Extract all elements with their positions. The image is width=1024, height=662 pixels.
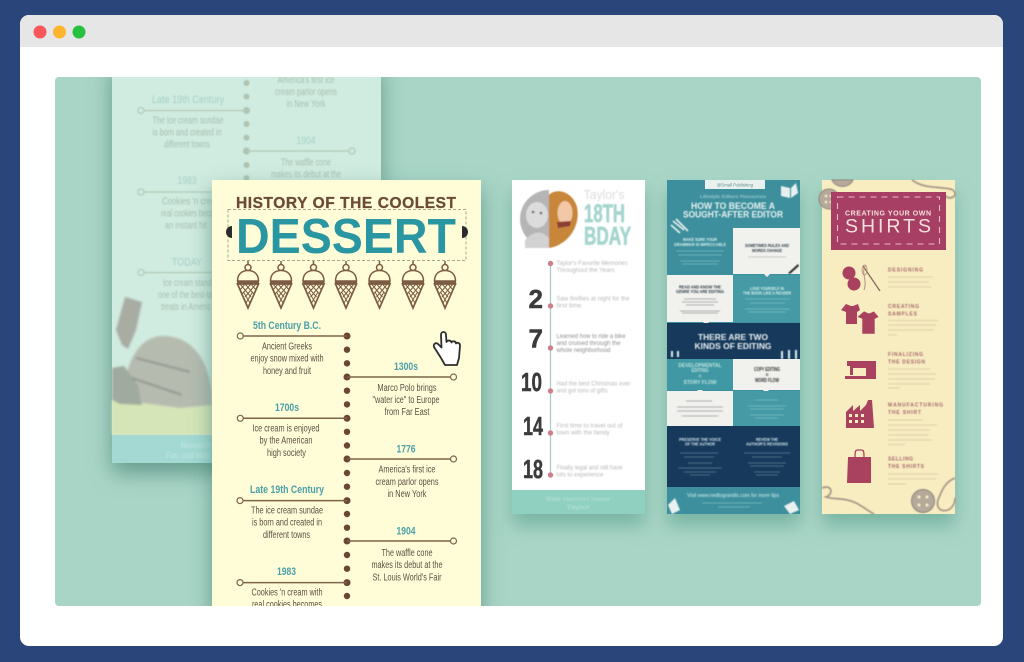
small body lines bbox=[676, 251, 790, 507]
memories: and got tons of gifts bbox=[556, 388, 608, 394]
title bar bbox=[20, 15, 1003, 47]
timeline: in New York bbox=[286, 99, 326, 110]
poster stage bbox=[112, 60, 955, 640]
back poster: faded dessert timeline bbox=[112, 60, 381, 463]
memories: Learned how to ride a bike bbox=[556, 333, 626, 340]
ages bbox=[521, 284, 543, 484]
headings and text: Lifestyle Editors Resources bbox=[700, 194, 767, 199]
timeline branches bbox=[237, 333, 456, 586]
heading bbox=[584, 190, 632, 246]
timeline: Ice cream stands bbox=[163, 278, 215, 289]
timeline: The waffle cone bbox=[281, 158, 331, 168]
heading: HISTORY OF THE COOLEST bbox=[236, 195, 457, 212]
timeline: TODAY bbox=[172, 256, 203, 268]
poster: how to become an editor bbox=[667, 180, 800, 514]
step headings: DESIGNING bbox=[888, 268, 923, 274]
timeline: The ice cream sundae bbox=[152, 116, 224, 126]
timeline text: 1983 bbox=[277, 566, 296, 578]
memories: Throughout the Years bbox=[556, 267, 614, 274]
window buttons bbox=[34, 26, 86, 38]
step headings: CREATING bbox=[888, 304, 919, 310]
timeline text: real cookies becomes bbox=[252, 600, 322, 610]
headings and text: OF THE AUTHOR bbox=[685, 442, 716, 446]
headings and text: WORD FLOW bbox=[755, 378, 779, 384]
notebook and decoration icons bbox=[668, 183, 799, 514]
icon: t-shirts bbox=[841, 304, 879, 334]
headings and text: PRESERVE THE VOICE bbox=[679, 437, 721, 442]
timeline: 1983 bbox=[178, 175, 196, 187]
heading: DESSERT bbox=[236, 209, 456, 264]
selection box bbox=[226, 210, 468, 260]
banner bbox=[831, 192, 946, 250]
ice cream cone row bbox=[237, 261, 456, 308]
poster: creating your own shirts bbox=[819, 180, 955, 514]
headings and text: GENRE YOU ARE EDITING bbox=[676, 289, 724, 294]
headings and text: THE BOOK LIKE A READER bbox=[743, 290, 792, 296]
timeline text: makes its debut at the bbox=[372, 560, 443, 571]
step headings: MANUFACTURING bbox=[888, 402, 943, 408]
memories: Had the best Christmas ever bbox=[556, 380, 630, 388]
timeline text: 1776 bbox=[396, 444, 416, 456]
ages: 2 bbox=[529, 284, 543, 314]
timeline text: by the American bbox=[260, 436, 312, 446]
timeline text: different towns bbox=[263, 530, 310, 541]
headings and text: THERE ARE TWO bbox=[698, 332, 768, 342]
timeline text: honey and fruit bbox=[263, 366, 311, 377]
memories: First time to travel out of bbox=[556, 422, 623, 430]
memories bbox=[556, 260, 630, 478]
portrait circle bbox=[520, 190, 578, 248]
timeline: is born and created in bbox=[152, 128, 222, 138]
headings and text: DEVELOPMENTAL bbox=[678, 363, 722, 369]
timeline: Research bbox=[181, 441, 211, 450]
icon: shopping bag bbox=[847, 450, 871, 483]
headings and text: KINDS OF EDITING bbox=[694, 341, 772, 351]
timeline: America's first ice bbox=[278, 75, 335, 86]
headings and text: LOSE YOURSELF IN bbox=[750, 286, 784, 291]
timeline text: 1700s bbox=[275, 402, 299, 414]
timeline text: enjoy snow mixed with bbox=[250, 354, 324, 364]
step headings: SELLING bbox=[888, 456, 913, 462]
headings and text: SOUGHT-AFTER EDITOR bbox=[683, 210, 783, 220]
headings and text: STORY FLOW bbox=[684, 380, 717, 386]
timeline text: from Far East bbox=[384, 407, 430, 418]
headings and text: WORDS CHANGE bbox=[752, 248, 782, 253]
timeline text: America's first ice bbox=[378, 464, 436, 476]
timeline text: cream parlor opens bbox=[376, 477, 438, 488]
headings and text: COPY EDITING bbox=[754, 367, 780, 373]
timeline: cream parlor opens bbox=[275, 87, 337, 98]
step headings: SAMPLES bbox=[888, 312, 918, 318]
timeline text: Cookies 'n cream with bbox=[252, 588, 322, 598]
vertical timeline bbox=[548, 261, 553, 478]
step headings: THE SHIRT bbox=[888, 410, 921, 416]
step headings bbox=[888, 268, 943, 470]
ages: 7 bbox=[529, 324, 543, 354]
poster: Taylor's 18th birthday bbox=[512, 180, 645, 514]
heading: 18TH bbox=[584, 200, 625, 228]
timeline text: 1300s bbox=[394, 361, 418, 373]
icon: sewing machine bbox=[845, 361, 876, 379]
headings and text: GRAMMAR IS IMPECCABLE bbox=[674, 242, 726, 247]
heading bbox=[236, 196, 456, 254]
timeline text: Ice cream is enjoyed bbox=[252, 424, 320, 434]
timeline text: 5th Century B.C. bbox=[253, 320, 321, 332]
icon: buttons and needle bbox=[842, 265, 880, 291]
memories: and cruised through the bbox=[556, 340, 621, 347]
timeline: one of the best-tast bbox=[158, 290, 218, 301]
timeline text: Late 19th Century bbox=[250, 484, 325, 496]
timeline text: St. Louis World's Fair bbox=[372, 572, 442, 584]
ice cream photo bbox=[112, 297, 212, 435]
timeline text: The waffle cone bbox=[382, 548, 433, 559]
tag bbox=[705, 180, 765, 189]
step body lines bbox=[888, 277, 938, 484]
timeline text: 1904 bbox=[396, 526, 416, 538]
icon: hand cursor bbox=[434, 332, 460, 365]
headings and text: Visit www.nedtograndis.com for more tips bbox=[687, 493, 779, 499]
timeline: treats in Americ bbox=[161, 302, 211, 313]
memories: Finally legal and still have bbox=[556, 464, 623, 472]
headings and text: REVIEW THE bbox=[756, 437, 778, 442]
timeline bbox=[138, 75, 355, 460]
memories: Saw fireflies at night for the bbox=[556, 296, 630, 302]
timeline: real cookies becom bbox=[161, 208, 219, 220]
content blocks bbox=[667, 228, 800, 487]
ages: 14 bbox=[523, 411, 543, 441]
headings and text: SOMETIMES RULES AND bbox=[745, 243, 790, 248]
step headings: FINALIZING bbox=[888, 352, 923, 358]
headings and text: EDITING bbox=[692, 368, 709, 374]
timeline text: is born and created in bbox=[252, 518, 322, 528]
banner: CREATING YOUR OWN bbox=[845, 210, 931, 218]
timeline text: Marco Polo brings bbox=[378, 383, 436, 394]
timeline spine bbox=[344, 332, 350, 599]
ages: 18 bbox=[523, 454, 543, 484]
headings and text: READ AND KNOW THE bbox=[679, 284, 721, 290]
timeline text bbox=[250, 320, 443, 610]
footer text: Taylor bbox=[566, 504, 591, 511]
tag: @Small Publishing bbox=[717, 182, 753, 188]
footer text bbox=[546, 496, 611, 511]
timeline text: high society bbox=[267, 448, 306, 459]
memories: first time bbox=[556, 302, 582, 310]
icons bbox=[841, 265, 880, 483]
headings and text: = bbox=[765, 372, 769, 378]
icon: factory bbox=[846, 400, 874, 428]
headings and text: MAKE SURE YOUR bbox=[683, 237, 718, 242]
headings and text: AUTHOR'S REVISIONS bbox=[746, 442, 788, 446]
front poster: history of dessert bbox=[212, 180, 481, 640]
timeline text: in New York bbox=[388, 489, 427, 500]
memories: town with the family bbox=[556, 430, 610, 436]
timeline: different towns bbox=[164, 140, 210, 150]
headings and text bbox=[674, 194, 792, 499]
mint panel bbox=[55, 77, 981, 606]
timeline text: "water ice" to Europe bbox=[372, 395, 440, 406]
footer band bbox=[112, 435, 212, 463]
memories: whole neighborhood bbox=[556, 347, 611, 354]
ages: 10 bbox=[521, 367, 542, 397]
timeline: 1904 bbox=[296, 135, 316, 147]
headings and text: = bbox=[699, 374, 702, 380]
memories: lots to experience bbox=[556, 472, 604, 478]
memories: Taylor's Favorite Memories bbox=[556, 260, 628, 267]
timeline: an instant hit bbox=[165, 220, 207, 232]
timeline: makes its debut at the bbox=[271, 170, 341, 180]
step headings: THE DESIGN bbox=[888, 360, 925, 366]
timeline text: The ice cream sundae bbox=[251, 506, 323, 516]
timeline: Fun, cold facts bbox=[166, 451, 210, 460]
timeline text: Ancient Greeks bbox=[262, 342, 312, 352]
footer text: Make memories forever bbox=[546, 496, 611, 503]
timeline: Cookies 'n cream bbox=[162, 196, 222, 208]
timeline: Late 19th Century bbox=[152, 94, 224, 106]
step headings: THE SHIRTS bbox=[888, 464, 925, 470]
headings and text: HOW TO BECOME A bbox=[691, 201, 775, 211]
banner: SHIRTS bbox=[845, 216, 931, 238]
corner buttons and thread bbox=[819, 180, 955, 514]
heading: Taylor's bbox=[584, 187, 625, 202]
heading: BDAY bbox=[584, 222, 631, 250]
